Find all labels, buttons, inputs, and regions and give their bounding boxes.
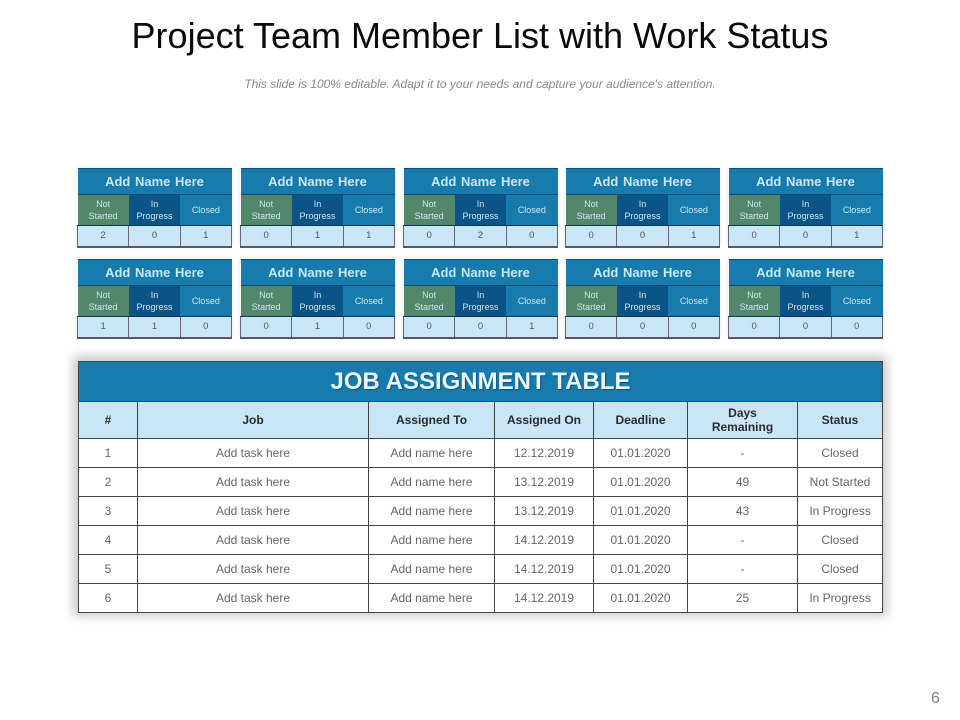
panel: member status card row 2 column 1: Not	[96, 290, 110, 300]
panel: member status card row 1 column 5: In	[802, 199, 809, 209]
panel: job assignment table: #	[105, 413, 111, 427]
panel: job assignment table: 01.01.2020	[610, 504, 671, 518]
panel: member status card row 2 column 1: 0	[203, 321, 208, 332]
panel: job assignment table: Not Started	[810, 475, 870, 489]
panel: member status card row 2 column 3: Progress	[462, 302, 498, 312]
panel: member status card row 2 column 4: 0	[640, 321, 645, 332]
panel: job assignment table: 1	[105, 446, 111, 460]
panel: member status card row 1 column 4: 0	[589, 230, 594, 241]
panel: job assignment table: 14.12.2019	[514, 562, 574, 576]
panel: member status card row 2 column 5: Started	[740, 302, 769, 312]
panel: member status card row 1 column 4: In	[639, 199, 646, 209]
panel: member status card row 1 column 1: In	[151, 199, 158, 209]
panel: job assignment table: Assigned To	[396, 413, 467, 427]
panel: member status card row 2 column 3: Started	[415, 302, 444, 312]
panel: member status card row 2 column 2: 1	[315, 321, 320, 332]
panel: member status card row 2 column 3: Closed	[518, 296, 546, 306]
panel: job assignment table: -	[740, 446, 744, 460]
panel: job assignment table: -	[740, 533, 744, 547]
panel: member status card row 1 column 1: 2	[101, 230, 106, 241]
panel: member status card row 1 column 4: 1	[691, 230, 696, 241]
panel: job assignment table: 49	[736, 475, 749, 489]
panel: job assignment table: 13.12.2019	[514, 475, 574, 489]
panel: member status card row 2 column 4: Started	[577, 302, 606, 312]
panel: job assignment table: Add task here	[216, 475, 290, 489]
panel: job assignment table: 13.12.2019	[514, 504, 574, 518]
panel: member status card row 2 column 2: Not	[259, 290, 273, 300]
panel: member status card row 2 column 5: Closed	[843, 296, 871, 306]
panel: member status card row 1 column 5: Progress	[787, 210, 824, 220]
panel: member status card row 2 column 4: Add Name Here	[593, 265, 692, 280]
panel: member status card row 2 column 3: 0	[478, 321, 483, 332]
panel: job assignment table: Add name here	[390, 591, 473, 605]
panel: member status card row 2 column 3: 1	[529, 321, 534, 332]
panel: job assignment table: 01.01.2020	[610, 562, 671, 576]
panel: member status card row 2 column 1: 1	[101, 321, 106, 332]
panel: member status card row 2 column 3	[403, 259, 558, 337]
panel: member status card row 1 column 3: 0	[427, 230, 432, 241]
panel: job assignment table: 14.12.2019	[514, 533, 574, 547]
panel: job assignment table: 01.01.2020	[610, 475, 671, 489]
panel: member status card row 2 column 2: Progress	[299, 302, 336, 312]
panel: member status card row 1 column 3: Started	[415, 210, 444, 220]
panel: job assignment table: Assigned On	[507, 413, 581, 427]
panel: member status card row 1 column 5: 0	[752, 230, 757, 241]
panel: member status card row 2 column 3: In	[477, 290, 484, 300]
panel: member status card row 1 column 1	[77, 168, 232, 246]
panel: job assignment table: Add task here	[216, 562, 290, 576]
panel: member status card row 2 column 1: Started	[89, 302, 118, 312]
panel: member status card row 1 column 2: Closed	[355, 205, 383, 215]
panel: member status card row 1 column 3	[403, 168, 558, 246]
panel: member status card row 1 column 2: In	[314, 199, 321, 209]
panel: member status card row 2 column 1: Add Name Here	[105, 265, 204, 280]
panel: job assignment table: Closed	[821, 533, 859, 547]
panel: member status card row 2 column 4: Not	[584, 290, 598, 300]
panel: member status card row 2 column 4	[565, 259, 720, 337]
panel: job assignment table: -	[740, 562, 744, 576]
panel: member status card row 1 column 1: Started	[89, 210, 118, 220]
panel: member status card row 2 column 5: 0	[803, 321, 808, 332]
panel: member status card row 2 column 5: Not	[747, 290, 761, 300]
panel: member status card row 1 column 5	[728, 168, 883, 246]
panel: job assignment table: JOB ASSIGNMENT TABLE	[330, 368, 631, 394]
panel: job assignment table: Add name here	[390, 504, 473, 518]
panel: member status card row 2 column 2: Started	[252, 302, 281, 312]
panel: member status card row 2 column 5: In	[802, 290, 809, 300]
panel: job assignment table: 5	[105, 562, 111, 576]
panel: member status card row 2 column 5: 0	[752, 321, 757, 332]
panel: member status card row 2 column 2: Closed	[355, 296, 383, 306]
panel: member status card row 1 column 3: 0	[529, 230, 534, 241]
panel: member status card row 2 column 2: Add Name Here	[268, 265, 367, 280]
panel: member status card row 2 column 4: Closed	[680, 296, 708, 306]
panel: job assignment table: Add task here	[216, 591, 290, 605]
panel: member status card row 1 column 5: 1	[854, 230, 859, 241]
panel: job assignment table: Add name here	[390, 446, 473, 460]
panel: member status card row 1 column 5: Add Name Here	[756, 174, 855, 189]
panel: member status card row 2 column 5: 0	[854, 321, 859, 332]
panel: job assignment table: Days	[728, 406, 757, 420]
panel: job assignment table: 43	[736, 504, 749, 518]
title: Project Team Member List with Work Status	[132, 15, 828, 56]
panel: member status card row 2 column 3: Add Name Here	[431, 265, 530, 280]
panel: member status card row 2 column 4: Progress	[624, 302, 660, 312]
panel: member status card row 2 column 1: Progress	[136, 302, 172, 312]
panel: member status card row 2 column 1: In	[151, 290, 158, 300]
panel: job assignment table: Add task here	[216, 533, 290, 547]
panel: member status card row 1 column 3: In	[477, 199, 484, 209]
panel: member status card row 1 column 2	[240, 168, 395, 246]
panel: job assignment table: Job	[242, 413, 264, 427]
panel: member status card row 1 column 1: Closed	[192, 205, 220, 215]
panel: job assignment table: Deadline	[615, 413, 666, 427]
panel: member status card row 1 column 1: 0	[152, 230, 157, 241]
panel: job assignment table: 01.01.2020	[610, 446, 671, 460]
panel: member status card row 2 column 1	[77, 259, 232, 337]
panel: member status card row 1 column 4: Progress	[624, 210, 660, 220]
panel: member status card row 2 column 1: Closed	[192, 296, 220, 306]
panel: member status card row 1 column 4: Not	[584, 199, 598, 209]
panel: member status card row 1 column 2: 1	[366, 230, 371, 241]
panel: job assignment table: 6	[105, 591, 111, 605]
panel: member status card row 1 column 3: Progress	[462, 210, 498, 220]
panel: member status card row 1 column 1: Add Name Here	[105, 174, 204, 189]
panel: job assignment table: Add name here	[390, 533, 473, 547]
panel: member status card row 2 column 3: Not	[422, 290, 436, 300]
panel: member status card row 1 column 3: 2	[478, 230, 483, 241]
panel: job assignment table: Add task here	[216, 504, 290, 518]
panel: member status card row 2 column 4: 0	[691, 321, 696, 332]
panel: member status card row 2 column 5: Progress	[787, 302, 824, 312]
panel: job assignment table	[78, 361, 882, 611]
panel: job assignment table: 01.01.2020	[610, 591, 671, 605]
panel: job assignment table: 01.01.2020	[610, 533, 671, 547]
panel: member status card row 2 column 4: 0	[589, 321, 594, 332]
panel: job assignment table: In Progress	[809, 591, 871, 605]
panel: job assignment table: 2	[105, 475, 111, 489]
panel: job assignment table: Add name here	[390, 475, 473, 489]
panel: job assignment table: 14.12.2019	[514, 591, 574, 605]
panel: member status card row 1 column 5: 0	[803, 230, 808, 241]
panel: member status card row 1 column 2: Add Name Here	[268, 174, 367, 189]
panel: member status card row 1 column 4: Add Name Here	[593, 174, 692, 189]
panel: job assignment table: Add name here	[390, 562, 473, 576]
panel: job assignment table: Remaining	[712, 420, 773, 434]
panel: member status card row 1 column 5: Not	[747, 199, 761, 209]
page number: 6	[931, 690, 940, 707]
panel: job assignment table: 12.12.2019	[514, 446, 574, 460]
panel: member status card row 1 column 3: Not	[422, 199, 436, 209]
panel: member status card row 2 column 2: In	[314, 290, 321, 300]
panel: job assignment table: Status	[822, 413, 858, 427]
panel: member status card row 2 column 1: 1	[152, 321, 157, 332]
panel: member status card row 1 column 3: Add Name Here	[431, 174, 530, 189]
panel: job assignment table: Closed	[821, 562, 859, 576]
panel: member status card row 1 column 2: Started	[252, 210, 281, 220]
panel: member status card row 1 column 2: 0	[264, 230, 269, 241]
panel: member status card row 2 column 2: 0	[264, 321, 269, 332]
panel: member status card row 2 column 3: 0	[427, 321, 432, 332]
panel: member status card row 1 column 1: 1	[203, 230, 208, 241]
panel: member status card row 1 column 4: 0	[640, 230, 645, 241]
panel: member status card row 1 column 4: Closed	[680, 205, 708, 215]
panel: member status card row 1 column 4	[565, 168, 720, 246]
panel: member status card row 2 column 2: 0	[366, 321, 371, 332]
panel: member status card row 1 column 4: Started	[577, 210, 606, 220]
panel: member status card row 2 column 2	[240, 259, 395, 337]
panel: member status card row 1 column 2: 1	[315, 230, 320, 241]
panel: job assignment table: 3	[105, 504, 111, 518]
panel: member status card row 2 column 4: In	[639, 290, 646, 300]
panel: job assignment table: Closed	[821, 446, 859, 460]
panel: member status card row 1 column 2: Not	[259, 199, 273, 209]
panel: job assignment table: Add task here	[216, 446, 290, 460]
panel: member status card row 1 column 2: Progress	[299, 210, 336, 220]
panel: job assignment table: 25	[736, 591, 749, 605]
panel: member status card row 1 column 1: Not	[96, 199, 110, 209]
subtitle: This slide is 100% editable. Adapt it to your needs and capture your audience's attention.	[244, 77, 716, 91]
panel: member status card row 1 column 3: Closed	[518, 205, 546, 215]
panel: member status card row 1 column 1: Progress	[136, 210, 172, 220]
panel: member status card row 1 column 5: Closed	[843, 205, 871, 215]
panel: member status card row 2 column 5	[728, 259, 883, 337]
panel: job assignment table: In Progress	[809, 504, 871, 518]
panel: job assignment table: 4	[105, 533, 111, 547]
panel: member status card row 1 column 5: Started	[740, 210, 769, 220]
panel: member status card row 2 column 5: Add Name Here	[756, 265, 855, 280]
